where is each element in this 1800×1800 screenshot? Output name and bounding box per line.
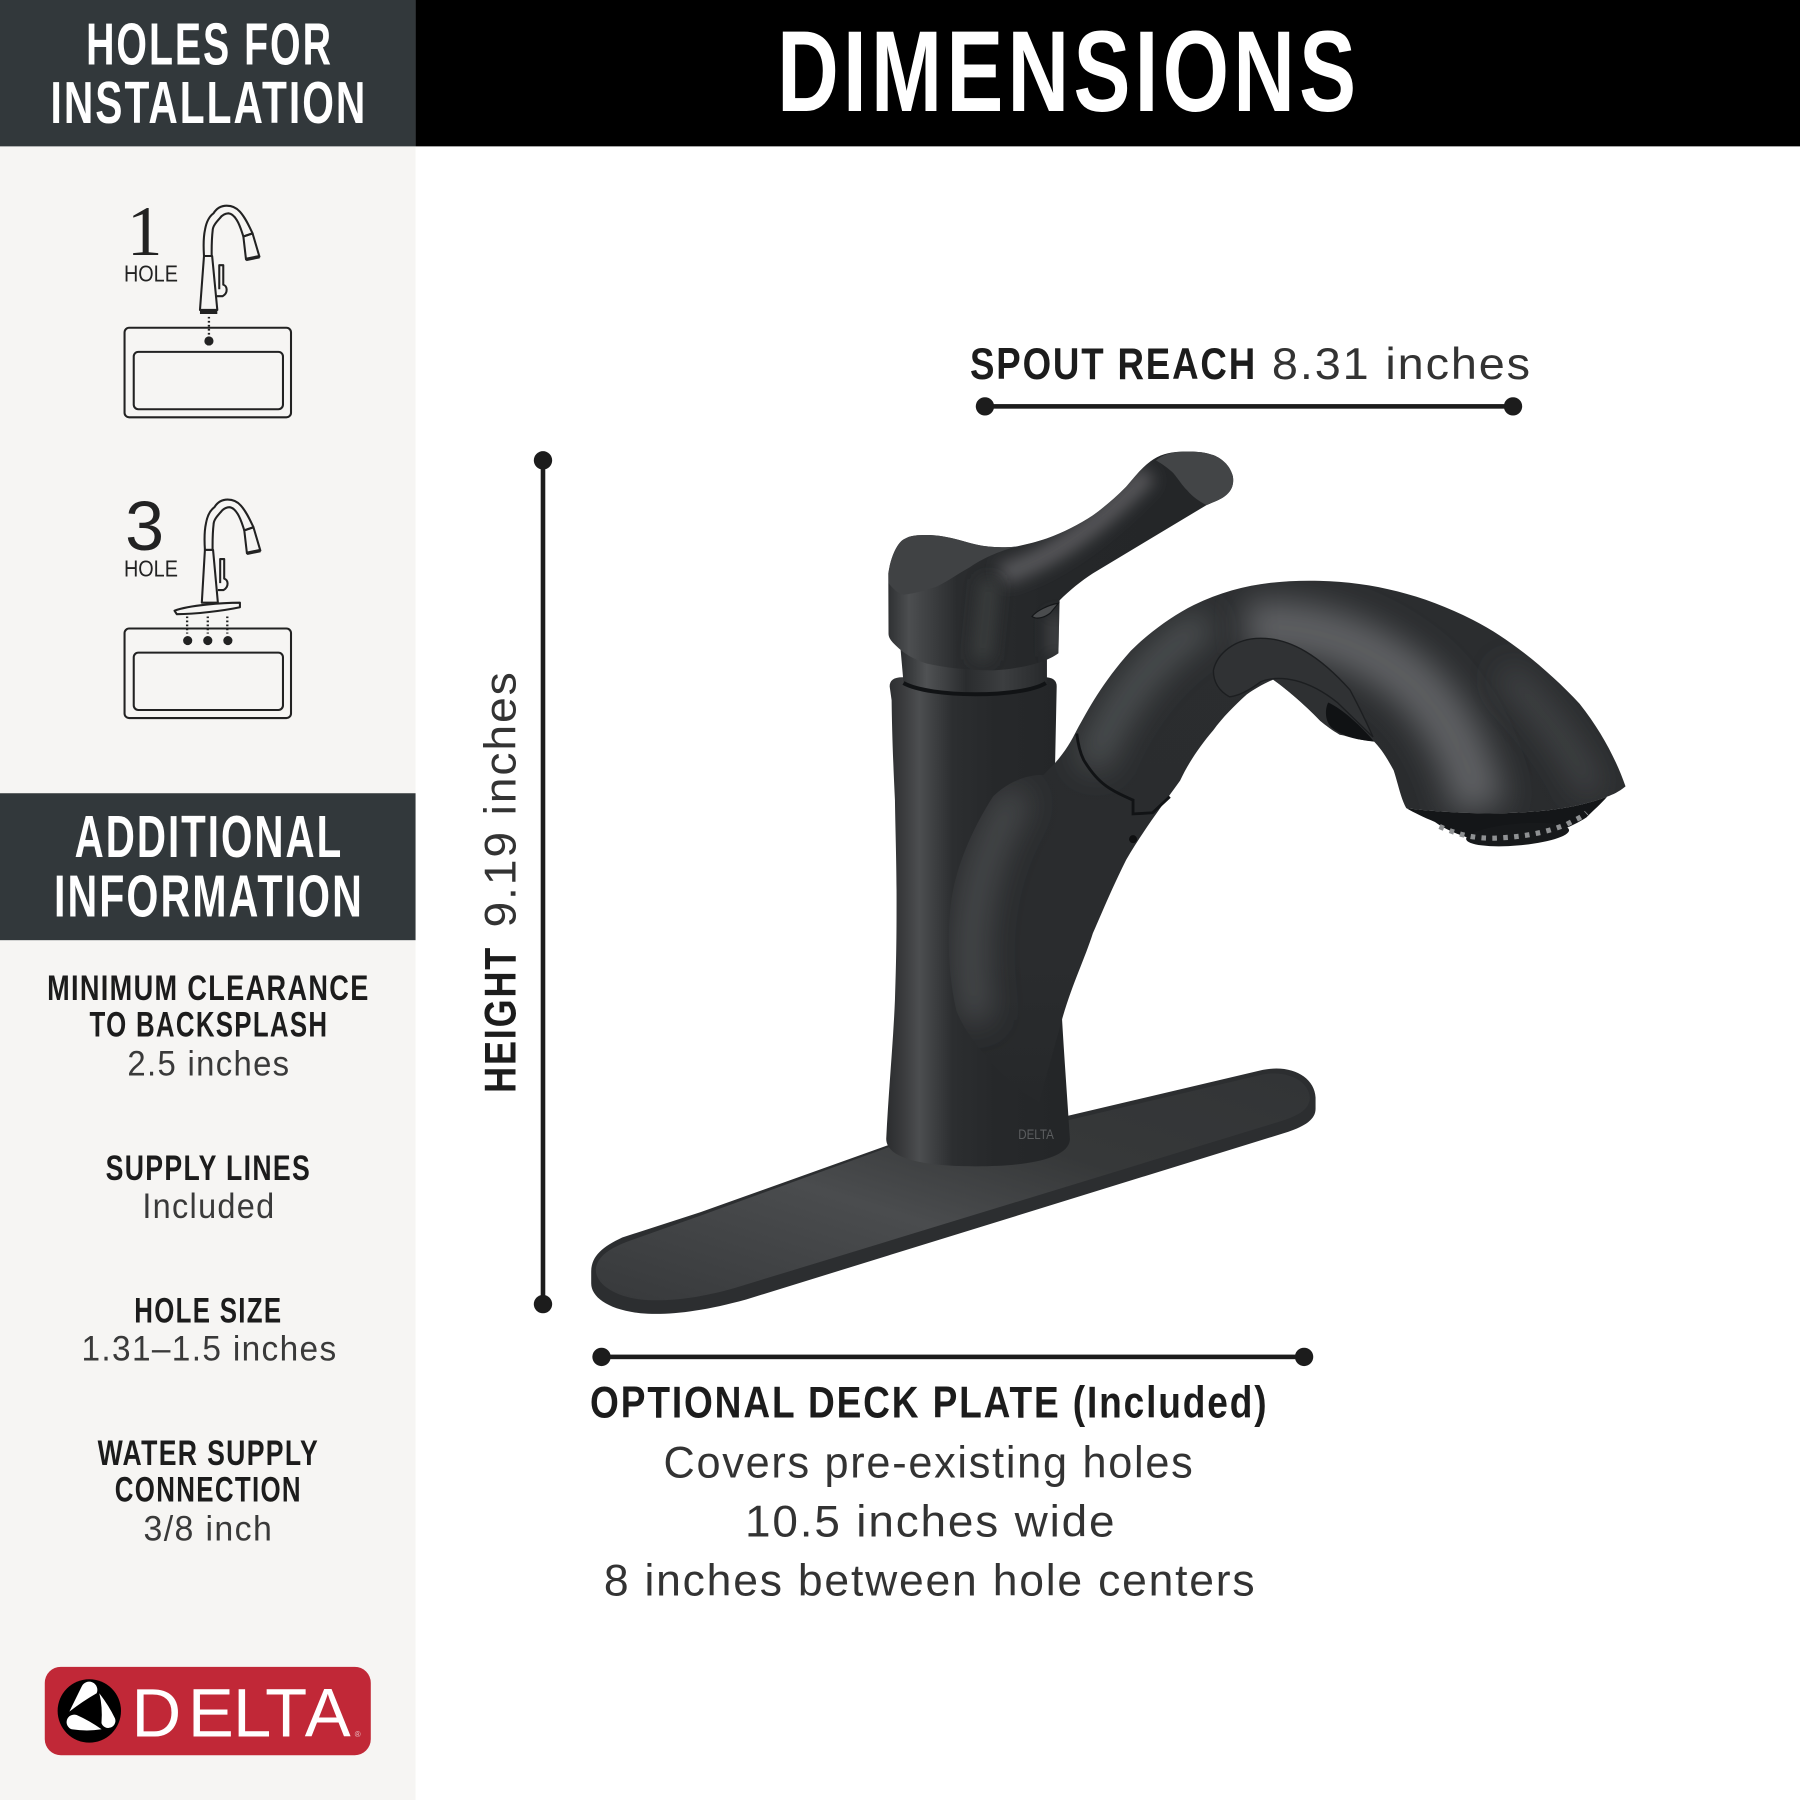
heading: holes for installation: INSTALLATION [51, 69, 367, 136]
logo: delta [45, 1667, 371, 1755]
handle button [1032, 603, 1058, 618]
text: minimum clearance [47, 968, 370, 1084]
text: optional deck plate: 8 inches between hole centers [604, 1556, 1256, 1606]
text: optional deck plate [590, 1378, 1268, 1606]
text: water supply connection [98, 1433, 319, 1549]
icon: three hole installation: 3 [125, 487, 164, 565]
text: hole size: HOLE SIZE [134, 1290, 282, 1330]
arrow: deck plate dimension [592, 1348, 1313, 1366]
deck plate [591, 1069, 1316, 1314]
title: dimensions: DIMENSIONS [777, 8, 1360, 136]
text: water supply connection: CONNECTION [115, 1470, 302, 1510]
text: hole size [82, 1290, 338, 1368]
handle cap face [889, 535, 1017, 595]
text: minimum clearance: MINIMUM CLEARANCE [47, 968, 370, 1008]
text: optional deck plate: Covers pre-existing holes [664, 1437, 1194, 1487]
icon: three hole installation [124, 487, 291, 718]
text: minimum clearance: 2.5 inches [127, 1044, 290, 1084]
text: supply lines: SUPPLY LINES [106, 1148, 311, 1188]
logo: delta: DELTA [131, 1674, 351, 1751]
header: dimensions bar [416, 0, 1800, 146]
text: supply lines: Included [142, 1186, 276, 1226]
heading: holes for installation [0, 0, 416, 146]
panel: left sidebar [0, 0, 416, 1800]
icon: three hole installation: HOLE [124, 555, 178, 581]
text: supply lines [106, 1148, 311, 1226]
heading: additional information: INFORMATION [54, 863, 364, 930]
text: hole size: 1.31–1.5 inches [82, 1328, 338, 1368]
collar groove [903, 683, 1046, 694]
arrow: height dimension [534, 451, 552, 1313]
column [886, 677, 1070, 1166]
spout highlights [971, 622, 1593, 1022]
label: spout reach: 8.31 inches [1272, 339, 1532, 389]
label: spout reach [970, 339, 1532, 389]
handle [888, 452, 1233, 670]
heading: additional information: ADDITIONAL [75, 803, 343, 870]
spout body [950, 580, 1626, 1028]
spray head [1406, 797, 1607, 850]
arrow: spout reach dimension [976, 397, 1522, 416]
handle highlights [982, 473, 1148, 660]
label: height [475, 670, 525, 1093]
heading: holes for installation: HOLES FOR [86, 10, 333, 77]
icon: one hole installation: 1 [127, 193, 162, 271]
label: height: HEIGHT [475, 946, 525, 1093]
spout panel [1213, 638, 1373, 737]
label: spout reach: SPOUT REACH [970, 339, 1257, 389]
text: optional deck plate: 10.5 inches wide [745, 1497, 1116, 1547]
hose [1273, 678, 1374, 742]
heading: additional information [0, 793, 416, 940]
illustration: faucet [591, 452, 1626, 1314]
text: water supply connection: 3/8 inch [143, 1509, 273, 1549]
icon: one hole installation [124, 193, 291, 417]
text: minimum clearance: TO BACKSPLASH [90, 1005, 328, 1045]
spout joint [1077, 734, 1170, 814]
label: height: 9.19 inches [475, 670, 525, 928]
handle tip face [1156, 452, 1233, 505]
faucet brand mark: DELTA [1018, 1127, 1055, 1142]
text: optional deck plate: OPTIONAL DECK PLATE (Included) [590, 1378, 1268, 1428]
text: water supply connection: WATER SUPPLY [98, 1433, 319, 1473]
icon: one hole installation: HOLE [124, 260, 178, 286]
logo: delta: ® [355, 1730, 361, 1739]
neck [900, 643, 1047, 693]
